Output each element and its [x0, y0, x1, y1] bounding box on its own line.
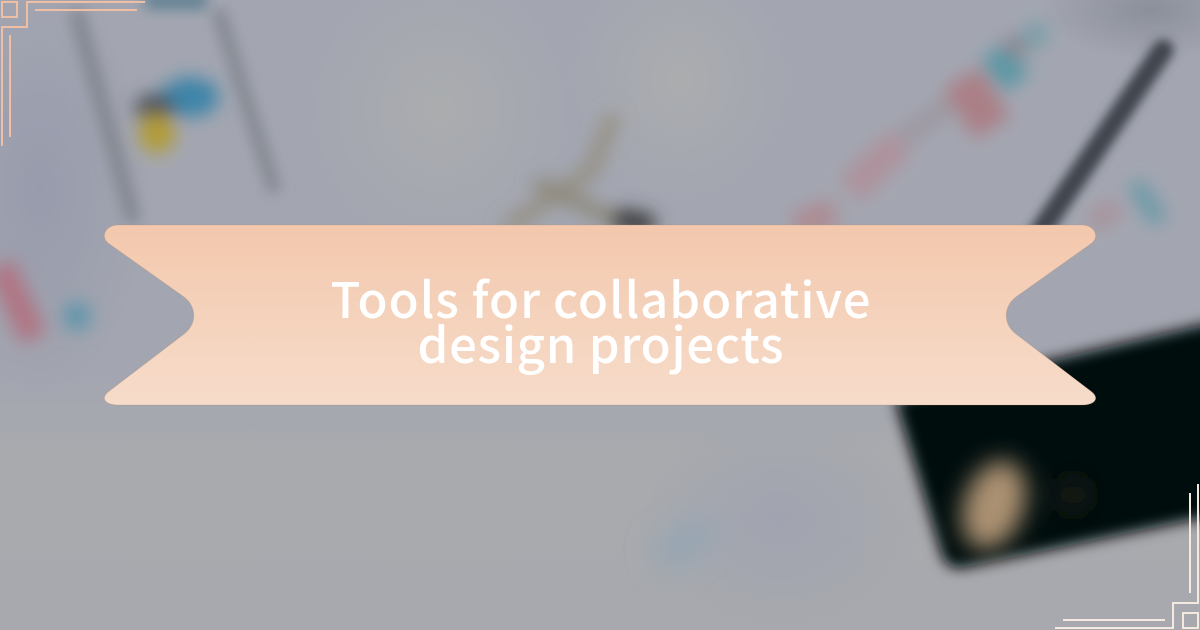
title — [330, 262, 870, 378]
corner ornament: top left — [2, 2, 145, 146]
title: Tools for collaborative — [330, 262, 870, 333]
line chart blur — [795, 28, 1046, 226]
left chart blur — [0, 265, 91, 338]
sheet edges — [76, 10, 275, 222]
pen blur — [1040, 50, 1163, 232]
glowing reflection — [950, 452, 1088, 558]
glasses blur — [510, 120, 645, 225]
corner ornament: bottom right — [1055, 484, 1198, 628]
black device — [895, 316, 1200, 568]
ribbon banner — [104, 225, 1096, 405]
right chart blur — [1092, 183, 1160, 224]
pie chart blur — [135, 77, 219, 153]
title: design projects — [418, 307, 784, 378]
